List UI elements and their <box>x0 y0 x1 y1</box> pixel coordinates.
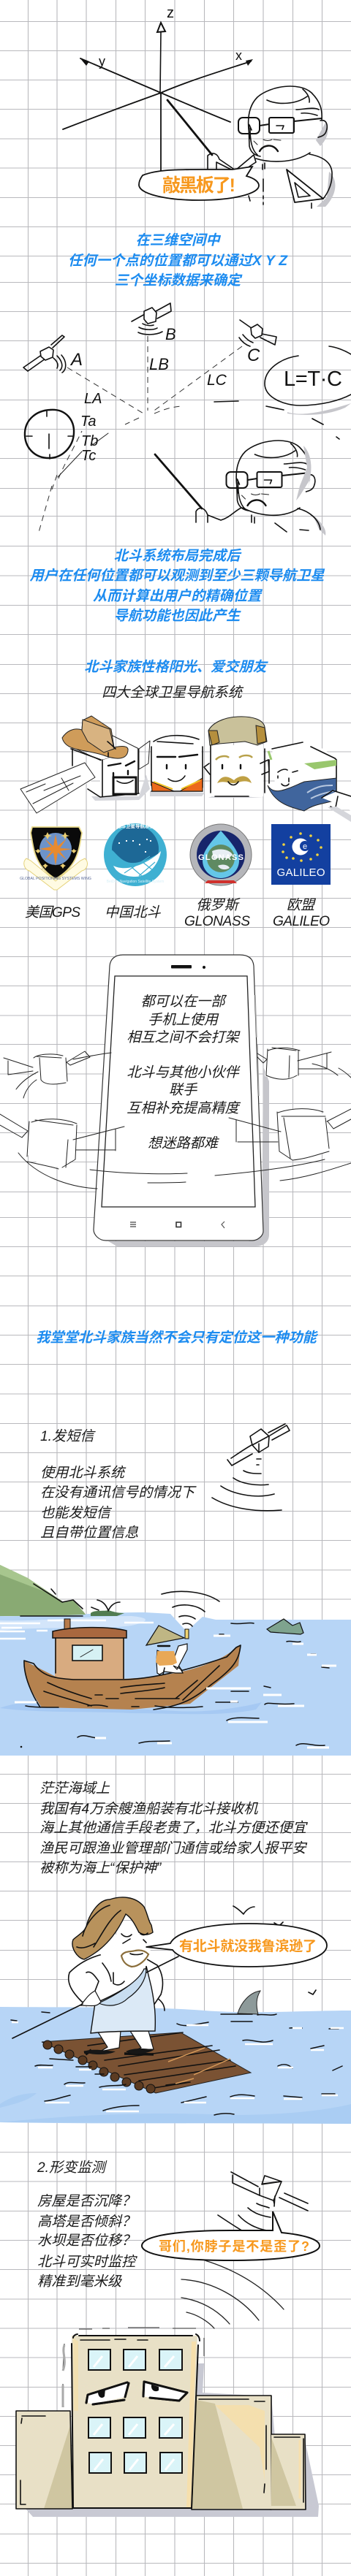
text: system labels <box>25 897 330 929</box>
icon: satellite C <box>239 320 276 365</box>
logo: GLONASS <box>190 824 252 885</box>
diagram: distance lines: LC <box>207 372 227 389</box>
heading: more than positioning: 我堂堂北斗家族当然不会只有定位这一种功能 <box>36 1330 319 1346</box>
signal from phone <box>162 1591 219 1626</box>
hull <box>24 1645 241 1710</box>
icon: clock with Ta Tb Tc <box>25 410 108 477</box>
text: phone screen copy: 手机上使用 <box>148 1012 219 1028</box>
text: section 1 SMS <box>40 1428 197 1541</box>
icon: clock with Ta Tb Tc: Tb <box>81 433 98 449</box>
icon: satellite with signal <box>212 1424 290 1511</box>
illustration: Robinson character <box>12 1897 178 2054</box>
ghost outline of upright building <box>63 2328 204 2407</box>
callout: Robinson speech bubble <box>146 1924 327 1967</box>
text: section 1 SMS: 在没有通讯信号的情况下 <box>40 1485 197 1501</box>
text: system labels: 美国GPS <box>25 904 80 921</box>
logo: Beidou <box>104 823 167 886</box>
text: system labels: 俄罗斯 <box>196 897 241 913</box>
logo: GPS shield <box>20 827 91 890</box>
text: XYZ explanation: 三个坐标数据来确定 <box>115 273 243 289</box>
diagram: distance lines: LB <box>149 355 169 373</box>
cube: bottom left satellite <box>0 1114 351 1189</box>
boat cabin <box>64 1619 70 1630</box>
text: fishing boats paragraph: 渔民可跟渔业管理部门通信或给家人报平安 <box>39 1840 307 1856</box>
text: XYZ explanation: 在三维空间中 <box>135 232 221 248</box>
illustration: satellites orbiting phone <box>0 1046 351 1189</box>
icon: clock with Ta Tb Tc: Ta <box>80 414 97 430</box>
icon: satellite A: A <box>69 350 83 370</box>
right block <box>192 2396 271 2509</box>
text: section 2 deformation monitoring: 水坝是否位移？ <box>37 2233 135 2249</box>
hair <box>72 1897 153 1959</box>
text: fishing boats paragraph: 被称为海上“保护神” <box>39 1860 162 1876</box>
illustration: sea with raft <box>0 1906 351 2124</box>
text: section 2 deformation monitoring: 北斗可实时监控 <box>37 2254 137 2270</box>
text: XYZ explanation: 任何一个点的位置都可以通过X Y Z <box>68 253 288 269</box>
text: phone screen copy: 想迷路都难 <box>148 1135 220 1151</box>
eyes and beard <box>121 1933 150 1947</box>
text: system labels: 中国北斗 <box>105 904 162 921</box>
text: phone screen copy: 北斗与其他小伙伴 <box>127 1064 241 1081</box>
callout: Robinson speech bubble: 有北斗就没我鲁滨逊了 <box>179 1937 317 1954</box>
islet <box>267 1619 303 1634</box>
callout: L=T·C thought bubble <box>214 346 351 439</box>
cube: GPS with cowboy hat <box>20 716 150 813</box>
text: section 2 deformation monitoring: 高塔是否倾斜？ <box>37 2214 135 2230</box>
icon: satellite B: B <box>165 325 176 343</box>
birds <box>233 1906 316 1994</box>
logo: Galileo <box>271 824 331 885</box>
icon: satellite B <box>132 303 176 343</box>
illustration: teacher with triangle ruler <box>167 86 335 208</box>
text: navigation explanation: 用户在任何位置都可以观测到至少三颗导航卫星 <box>30 568 325 584</box>
text: fishing boats paragraph: 茫茫海域上 <box>39 1780 110 1796</box>
far right block <box>271 2434 305 2510</box>
logo: GLONASS: GLONASS <box>198 853 244 862</box>
chart: XYZ coordinate axes: y <box>99 54 105 69</box>
illustration: tilted building with face <box>16 2328 319 2517</box>
text: section 1 SMS: 且自带位置信息 <box>40 1525 139 1541</box>
text: section 1 SMS: 1.发短信 <box>40 1428 96 1444</box>
chart: XYZ coordinate axes: x <box>235 48 242 63</box>
logo: Galileo: e <box>303 842 307 851</box>
text: section 1 SMS: 使用北斗系统 <box>40 1465 127 1481</box>
icon: satellite C: C <box>247 346 260 365</box>
torso <box>69 1954 162 2005</box>
icon: satellite upside down with signal <box>218 2172 308 2232</box>
cube: Beidou with orange scarf <box>139 736 205 796</box>
face <box>99 1921 151 1966</box>
text: phone screen copy: 相互之间不会打架 <box>127 1029 241 1045</box>
logo: GPS shield: GLOBAL POSITIONING SYSTEMS WING <box>20 877 91 881</box>
legs <box>97 2031 154 2051</box>
callout: building speech bubble <box>142 2211 320 2260</box>
callout: 敲黑板了: 敲黑板了! <box>162 175 235 196</box>
callout: building speech bubble: 哥们,你脖子是不是歪了? <box>159 2239 309 2254</box>
text: navigation explanation <box>30 548 325 624</box>
logo: Beidou: 北斗卫星导航系统 <box>116 823 155 829</box>
cloth <box>91 1966 155 2033</box>
text: system labels: GLONASS <box>184 914 250 929</box>
illustration: phone <box>94 955 269 1246</box>
text: navigation explanation: 从而计算出用户的精确位置 <box>93 588 263 604</box>
windows <box>88 2350 182 2473</box>
logo: Beidou: BeiDou Navigation Satellite System <box>107 880 164 884</box>
heading: four GNSS: 四大全球卫星导航系统 <box>102 685 244 701</box>
spear <box>12 1956 178 2038</box>
text: section 2 deformation monitoring <box>37 2160 137 2290</box>
waves <box>11 2012 342 2115</box>
water <box>0 1612 351 1756</box>
cube: top left satellite <box>4 1051 111 1098</box>
text: phone screen copy: 都可以在一部 <box>140 994 227 1010</box>
island <box>0 1565 86 1616</box>
text: system labels: 欧盟 <box>287 897 317 913</box>
cube: bottom right satellite <box>229 1109 351 1160</box>
text: phone screen copy: 联手 <box>169 1082 198 1098</box>
fisherman <box>156 1644 187 1674</box>
illustration: sea scene with boat <box>0 1565 351 1756</box>
text: XYZ explanation <box>68 232 288 289</box>
text: section 2 deformation monitoring: 精准到毫米级 <box>37 2274 123 2290</box>
shark fin <box>238 1991 260 2014</box>
cube: Galileo with scarf <box>260 742 351 822</box>
main block <box>72 2336 197 2508</box>
callout: 敲黑板了 <box>139 167 259 200</box>
text: phone screen copy: 互相补充提高精度 <box>127 1100 241 1116</box>
text: section 2 deformation monitoring: 2.形变监测 <box>37 2160 107 2176</box>
chart: XYZ coordinate axes <box>63 5 253 172</box>
diagram: distance lines <box>38 336 242 535</box>
waves <box>26 1623 329 1745</box>
chart: XYZ coordinate axes: z <box>167 5 174 21</box>
heading: Beidou family: 北斗家族性格阳光、爱交朋友 <box>84 659 269 675</box>
text: section 2 deformation monitoring: 房屋是否沉降？ <box>37 2193 135 2209</box>
cube: top right satellite <box>257 1046 351 1081</box>
text: section 1 SMS: 也能发短信 <box>40 1505 113 1521</box>
building eyes <box>86 2382 187 2404</box>
left block <box>16 2411 72 2509</box>
signal arcs to building <box>181 2260 284 2328</box>
cube: GLONASS with ushanka <box>204 717 267 798</box>
text: fishing boats paragraph: 海上其他通信手段老贵了，北斗方便还便宜 <box>39 1820 309 1836</box>
text: fishing boats paragraph <box>39 1780 309 1876</box>
icon: clock with Ta Tb Tc: Tc <box>81 448 96 464</box>
text: fishing boats paragraph: 我国有4万余艘渔船装有北斗接收机 <box>39 1801 258 1817</box>
raft <box>42 2032 251 2093</box>
diagram: distance lines: LA <box>84 391 102 407</box>
illustration: teacher with pointer <box>155 441 325 536</box>
icon: satellite A <box>23 335 83 373</box>
text: navigation explanation: 导航功能也因此产生 <box>114 608 241 624</box>
shadow <box>26 2363 319 2517</box>
logo: Galileo: GALILEO <box>276 866 325 879</box>
illustration: four satellite cube characters <box>20 716 351 822</box>
text: phone screen copy <box>127 994 241 1151</box>
text: system labels: GALILEO <box>273 914 330 929</box>
callout: L=T·C thought bubble: L=T·C <box>284 367 342 391</box>
text: navigation explanation: 北斗系统布局完成后 <box>114 548 242 564</box>
